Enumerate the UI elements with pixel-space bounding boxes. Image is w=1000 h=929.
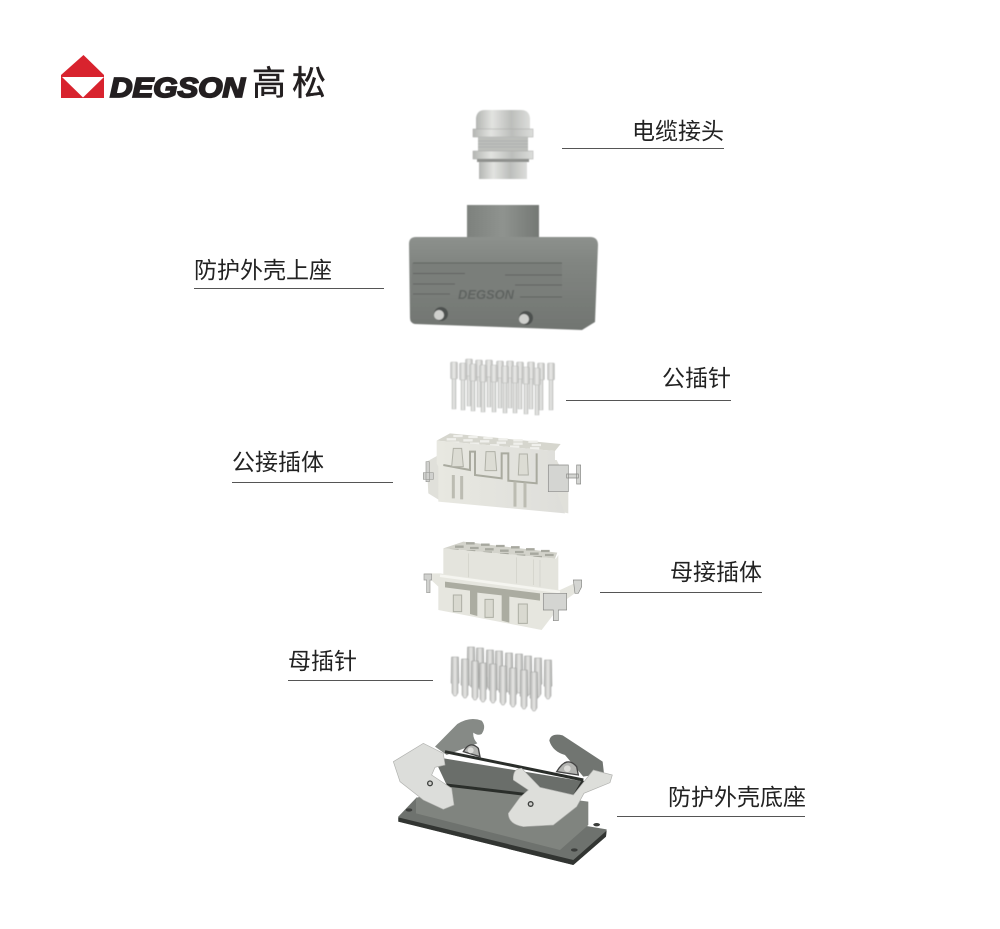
hood bolts	[434, 307, 533, 325]
label: female pins: 母插针	[288, 648, 357, 674]
label: hood upper: 防护外壳上座	[194, 257, 332, 283]
brand name latin: DEGSON	[110, 72, 246, 103]
inner wall	[433, 757, 585, 800]
insert body	[437, 441, 565, 513]
left lever	[393, 743, 454, 809]
component: male pins	[450, 359, 554, 415]
label: female insert: 母接插体	[670, 559, 762, 585]
right flange	[538, 460, 568, 513]
rails	[445, 752, 583, 800]
insert top face	[437, 433, 561, 451]
component: cable gland	[473, 110, 533, 179]
back hook right	[549, 735, 604, 777]
base plate	[398, 797, 607, 865]
flange	[424, 573, 582, 630]
upper body	[443, 548, 558, 592]
component: female insert	[424, 542, 582, 630]
hood collar	[467, 205, 539, 239]
pivots	[463, 745, 578, 775]
back hook left	[435, 719, 484, 755]
logo: DEGSON 高松	[61, 55, 326, 103]
icon: red house mark	[61, 55, 104, 98]
component: protective housing base	[393, 719, 612, 865]
left screw	[423, 462, 433, 482]
hood logo text: DEGSON	[458, 287, 515, 302]
label: cable gland: 电缆接头	[632, 118, 724, 144]
top face	[443, 542, 557, 559]
component: male insert	[423, 433, 581, 513]
brand name chinese: 高松	[252, 65, 326, 103]
right screw	[548, 465, 581, 492]
lower band and pillars	[445, 582, 540, 623]
label: male insert: 公接插体	[232, 449, 324, 475]
right screw	[543, 580, 582, 621]
front wall	[416, 783, 588, 850]
component: protective hood upper	[409, 205, 598, 330]
hood body	[409, 237, 598, 330]
left flange	[427, 453, 442, 502]
component: female pins	[451, 647, 552, 711]
label: male pins: 公插针	[662, 365, 731, 391]
left screw	[424, 574, 432, 593]
right lever	[508, 768, 612, 827]
label: housing base: 防护外壳底座	[668, 784, 806, 810]
